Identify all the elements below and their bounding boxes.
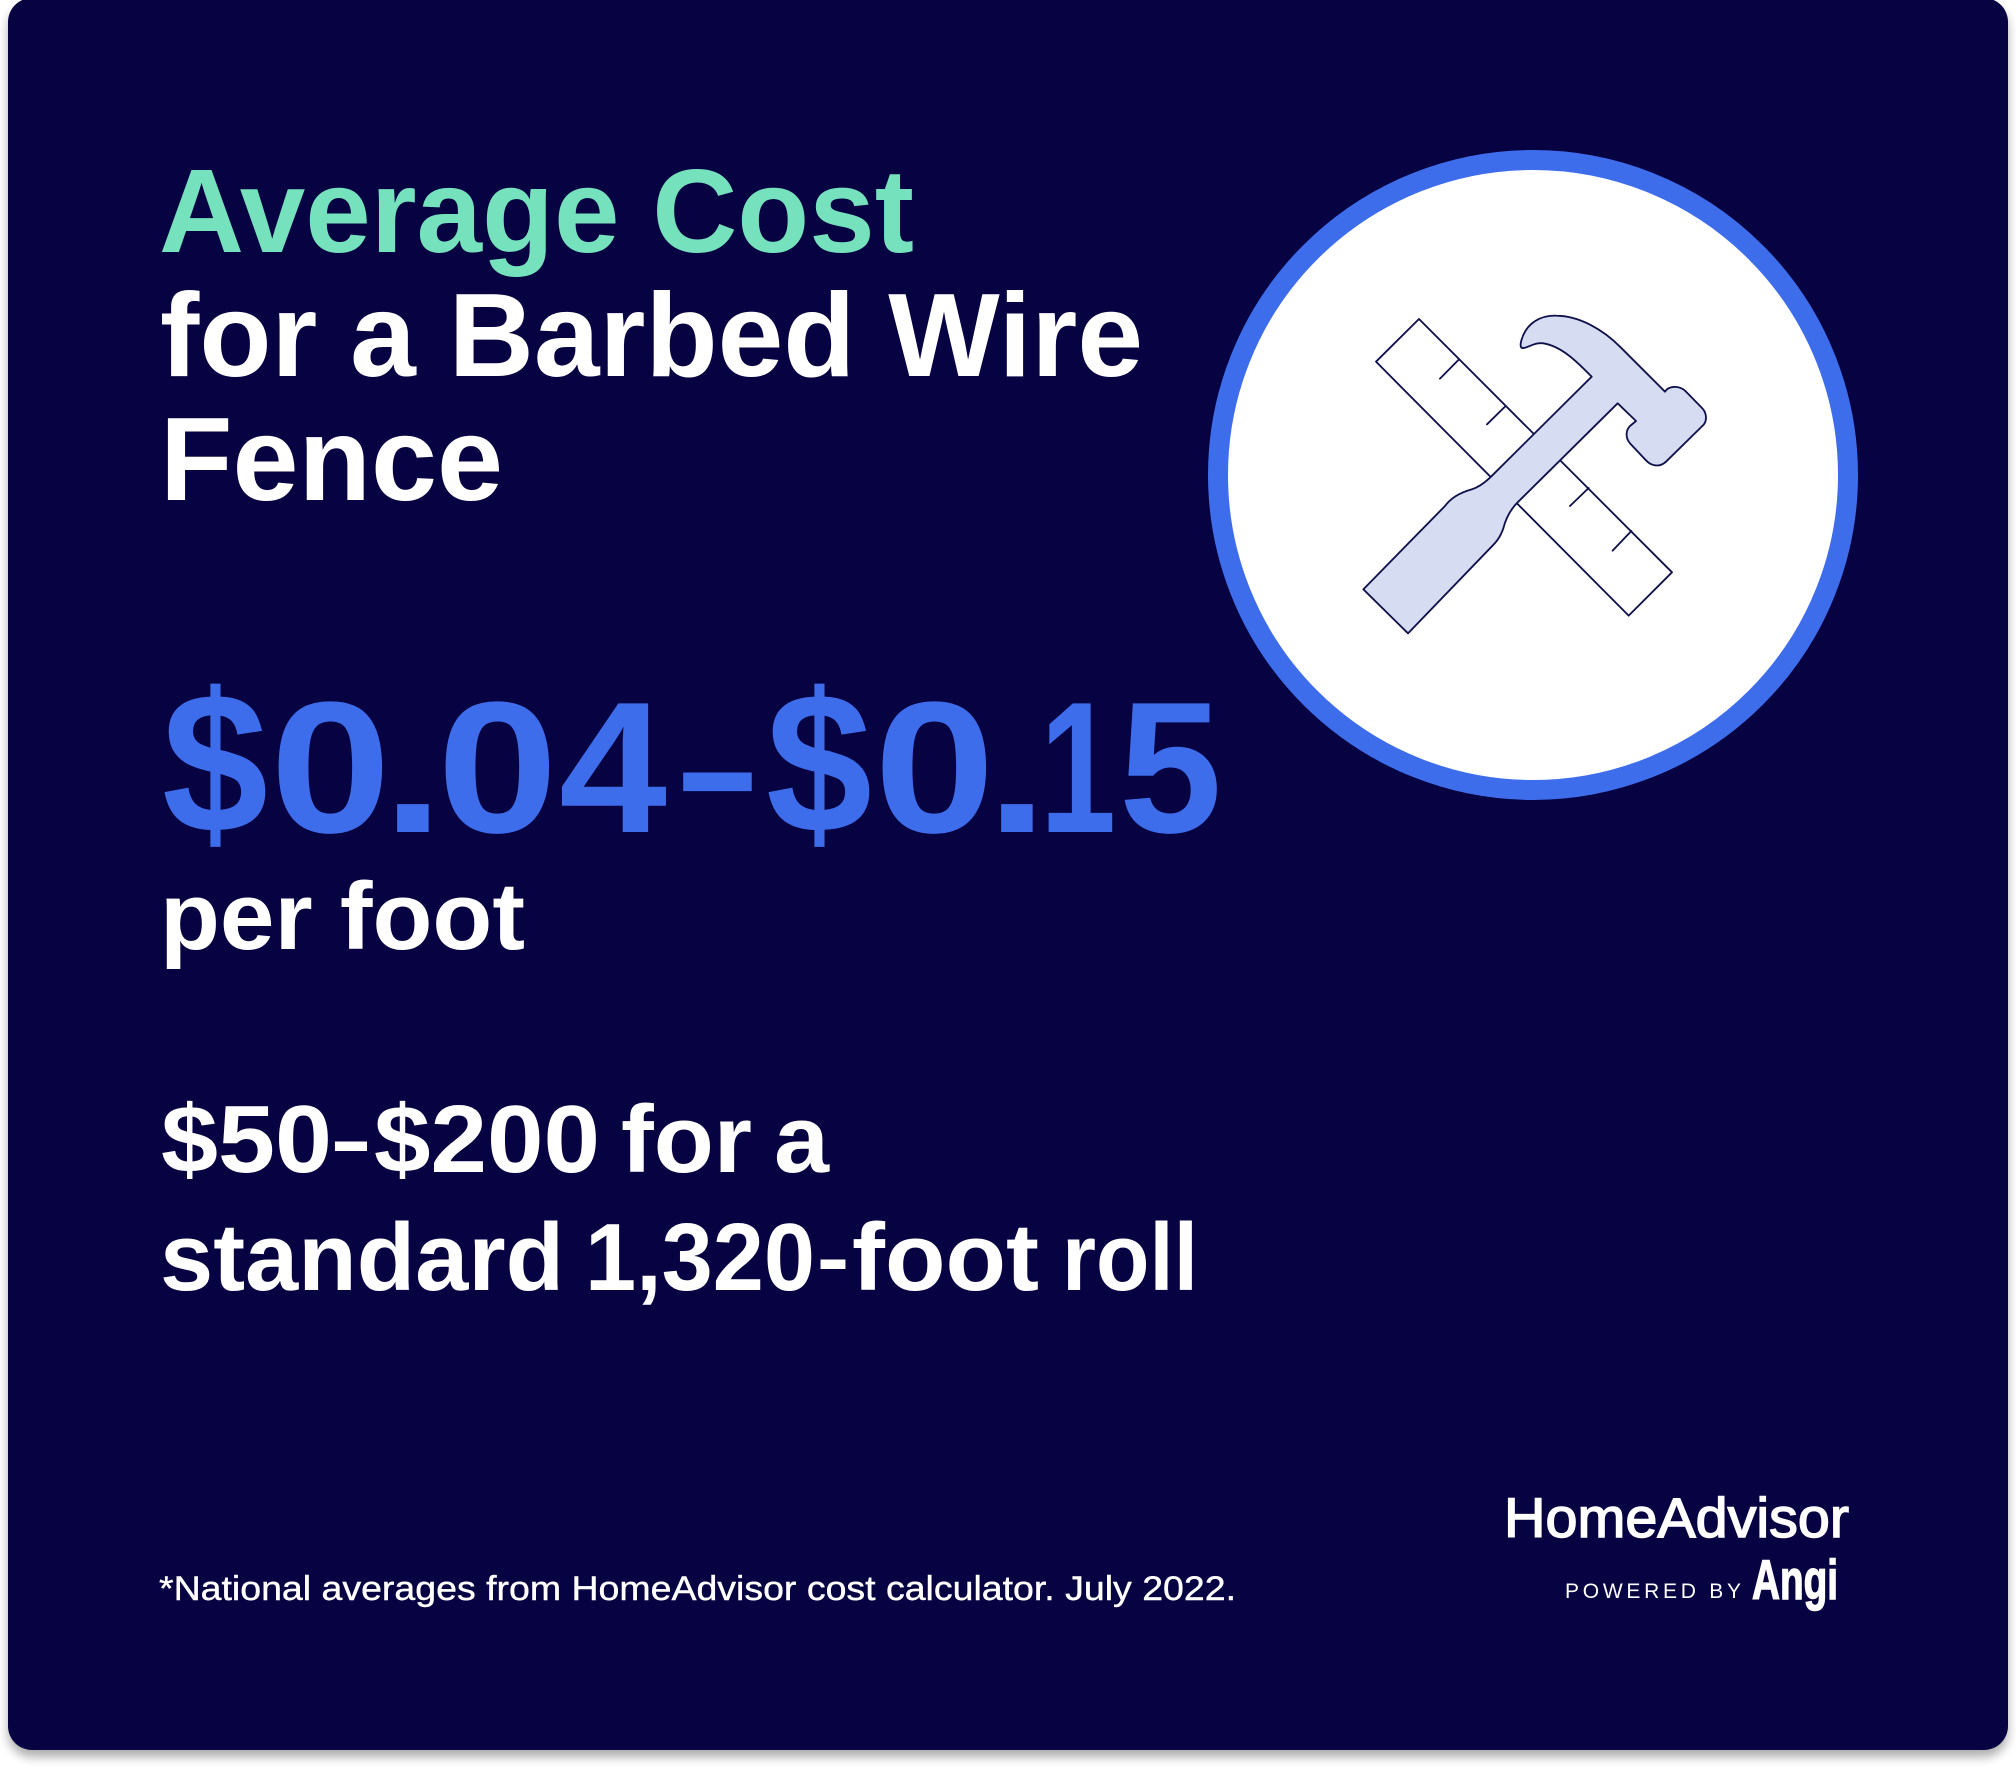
roll cost line 1: a — [774, 1086, 830, 1193]
logo: HomeAdvisor powered by Angi — [1504, 1486, 1849, 1611]
icon: circle badge with ruler and hammer — [1218, 160, 1848, 790]
price range: $ — [766, 652, 872, 875]
roll cost line 1: $50 — [161, 1086, 332, 1193]
price range: $ — [162, 652, 268, 875]
icon: ruler — [1376, 319, 1672, 616]
price range: . — [382, 663, 444, 872]
roll cost line 2: – — [819, 1204, 847, 1311]
roll cost line 2: roll — [1062, 1204, 1198, 1311]
roll cost line 1: $200 — [374, 1086, 600, 1193]
Angi wordmark: Angi — [1752, 1548, 1838, 1611]
price range: 5 — [1119, 663, 1222, 872]
price per foot — [160, 652, 1222, 970]
title line: Average Cost: Average Cost — [159, 145, 914, 278]
roll cost line 1: for — [621, 1086, 752, 1193]
title line: for a Barbed Wire: for a Barbed Wire — [160, 269, 1143, 402]
footnote: *National averages from HomeAdvisor cost calculator. July 2022. — [159, 1570, 1236, 1608]
price range: 0 — [874, 663, 995, 872]
price range: 1 — [1040, 663, 1116, 872]
title line: Fence: Fence — [160, 393, 503, 526]
icon: hammer — [1363, 316, 1706, 633]
roll cost line 2: foot — [852, 1204, 1039, 1311]
icon: crossed ruler and hammer — [1363, 316, 1706, 633]
roll cost line 1: – — [333, 1086, 369, 1193]
price range: 4 — [559, 663, 667, 872]
title — [159, 145, 1143, 526]
roll cost line 2: standard — [160, 1204, 564, 1311]
price range: 0 — [270, 663, 391, 872]
roll cost line 2: 1,320 — [585, 1204, 815, 1311]
price range: 0 — [437, 663, 558, 872]
price range: . — [986, 663, 1048, 872]
logo wordmark: HomeAdvisor — [1504, 1486, 1849, 1549]
badge circle — [1218, 160, 1848, 790]
powered by label: POWERED BY — [1565, 1580, 1741, 1603]
roll cost — [160, 1086, 1198, 1311]
price range: – — [679, 663, 756, 872]
per foot label: per foot — [160, 863, 525, 970]
